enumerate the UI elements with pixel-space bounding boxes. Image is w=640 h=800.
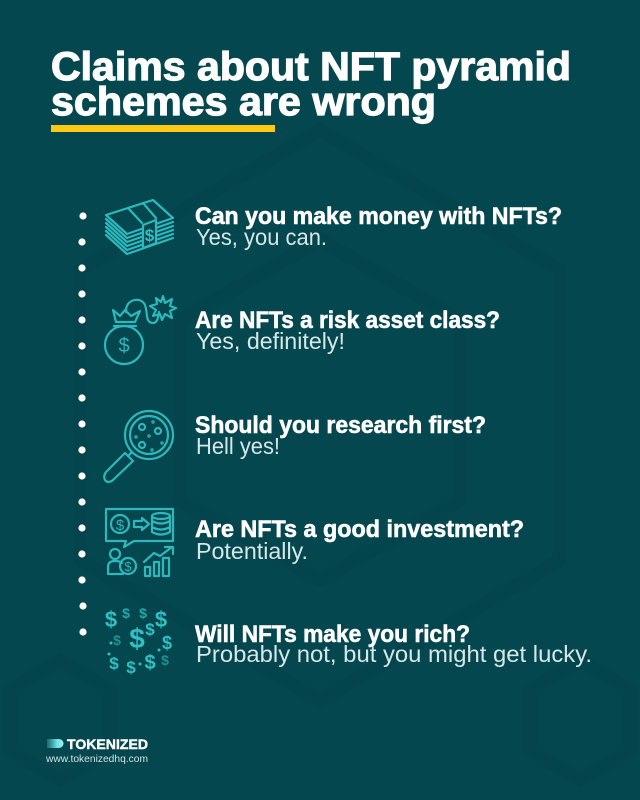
item 5 text: Will NFTs make you rich? [195,621,470,648]
item 1 text: Can you make money with NFTs? [195,203,562,230]
icon: scattered dollar signs: $ [144,652,156,674]
title: Claims about NFT pyramid [51,45,571,89]
item 5 text [195,621,592,667]
footer logo: TOKENIZED [67,737,148,752]
icon: scattered dollar signs: $ [109,654,119,673]
icon: scattered dollar signs: $ [161,652,169,668]
icon: stack of money: $ [145,226,155,245]
icon: scattered dollar signs: $ [155,607,167,632]
icon: investment exchange and growth chart: $ [124,559,132,574]
icon: stack of money [106,200,173,254]
item 4 text: Potentially. [196,538,308,564]
item 1 text: Yes, you can. [196,224,327,250]
item 5 text: Probably not, but you might get lucky. [196,641,592,667]
icon: scattered dollar signs: $ [129,623,145,654]
icon: scattered dollar signs: $ [145,620,155,639]
footer url: www.tokenizedhq.com [45,753,148,765]
item 2 text: Yes, definitely! [196,328,345,354]
title underline [51,125,275,132]
title [51,45,571,124]
item 3 text: Should you research first? [195,412,486,439]
icon: scattered dollar signs: $ [122,605,130,621]
icon: investment exchange and growth chart [106,509,173,576]
item 3 text: Hell yes! [196,433,280,459]
icon: money bag bomb: $ [118,335,130,357]
icon: scattered dollar signs [105,605,172,677]
icon: scattered dollar signs: $ [139,605,147,621]
item 3 text [195,412,486,459]
item 4 text [195,516,524,564]
item 4 text: Are NFTs a good investment? [195,516,524,543]
icon: scattered dollar signs: $ [105,607,117,632]
title: schemes are wrong [51,80,436,124]
dotted timeline [78,212,87,636]
icon: investment exchange and growth chart: $ [116,517,125,534]
icon: scattered dollar signs: $ [126,658,136,677]
item 2 text [195,307,500,354]
item 2 text: Are NFTs a risk asset class? [195,307,500,334]
item 1 text [195,203,562,250]
icon: magnifying glass [104,411,173,482]
icon: scattered dollar signs: $ [113,632,121,648]
icon: scattered dollar signs: $ [162,633,172,653]
icon: money bag bomb [105,296,176,364]
